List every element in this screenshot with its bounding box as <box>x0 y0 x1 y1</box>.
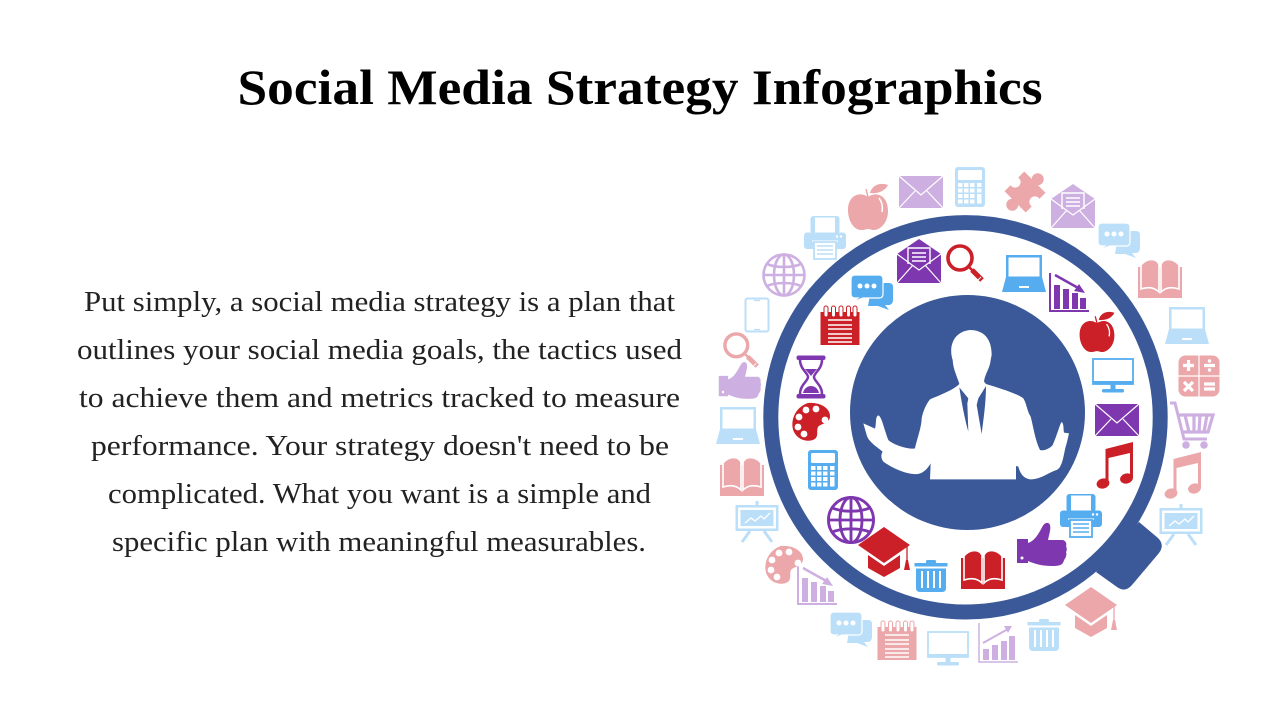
icon: laptop <box>1165 307 1209 344</box>
icon: apple <box>848 184 888 230</box>
magnifier ring <box>771 223 1160 612</box>
icon: notepad <box>878 621 916 660</box>
body paragraph: performance. Your strategy doesn't need to be <box>91 431 669 462</box>
presenter silhouette <box>863 330 1069 479</box>
icon: thumbs up <box>1017 523 1067 566</box>
icon: palette <box>792 403 830 441</box>
icon: magnifier <box>725 334 757 366</box>
icon: presentation easel <box>1160 504 1202 545</box>
icon: calculator operators <box>1178 356 1220 396</box>
centre circle <box>850 295 1085 530</box>
icon: thumbs up <box>719 362 761 399</box>
magnifying glass graphic <box>771 223 1162 612</box>
icon: presentation easel <box>736 501 778 542</box>
icon: hourglass <box>796 356 826 398</box>
body paragraph: to achieve them and metrics tracked to measure <box>79 383 680 414</box>
icon: shopping cart <box>1170 403 1213 449</box>
icon: book <box>1138 260 1182 298</box>
inner ring of saturated icons <box>792 239 1139 592</box>
body paragraph: complicated. What you want is a simple and <box>108 479 651 510</box>
icon: music note <box>1163 452 1202 500</box>
icon: printer <box>1060 494 1102 537</box>
icon: rising chart <box>979 623 1018 662</box>
icon: palette <box>765 546 803 584</box>
icon: puzzle piece <box>994 161 1056 223</box>
magnifier handle <box>1096 522 1162 590</box>
icon: graduation cap <box>858 527 910 577</box>
icon: monitor <box>928 632 968 666</box>
icon: open envelope <box>897 239 941 283</box>
icon: globe <box>828 497 874 543</box>
icon: magnifier <box>948 246 982 280</box>
icon: graduation cap <box>1065 587 1117 637</box>
icon: envelope <box>1095 404 1139 436</box>
icon: music note <box>1095 442 1134 490</box>
icon: chat bubbles <box>830 612 872 647</box>
icon: falling chart <box>1050 273 1089 311</box>
icon: globe <box>764 254 804 296</box>
icon: notepad <box>820 306 860 345</box>
icon: apple <box>1080 312 1114 352</box>
body paragraph: specific plan with meaningful measurables. <box>112 527 646 558</box>
icon: envelope <box>899 176 943 208</box>
icon: monitor <box>1093 359 1133 392</box>
icon: trash can <box>914 560 948 592</box>
outer ring of pale icons <box>716 161 1220 666</box>
icon: calculator <box>955 167 985 207</box>
icon: printer <box>804 216 846 259</box>
icon: trash can <box>1028 619 1060 651</box>
icon: falling chart <box>798 566 837 604</box>
body paragraph: outlines your social media goals, the tactics used <box>77 335 682 366</box>
icon: laptop <box>716 407 760 444</box>
icon: book <box>961 551 1005 589</box>
icon: chat bubbles <box>1098 223 1140 258</box>
icon: book <box>720 458 764 496</box>
title: Social Media Strategy Infographics <box>238 59 1042 115</box>
icon: calculator <box>808 450 838 490</box>
icon: tablet <box>746 298 768 332</box>
icon: open envelope <box>1051 184 1095 228</box>
icon: laptop <box>1002 255 1046 292</box>
icon: chat bubbles <box>851 275 893 310</box>
body paragraph: Put simply, a social media strategy is a plan that <box>84 287 675 318</box>
body paragraph <box>77 287 682 558</box>
